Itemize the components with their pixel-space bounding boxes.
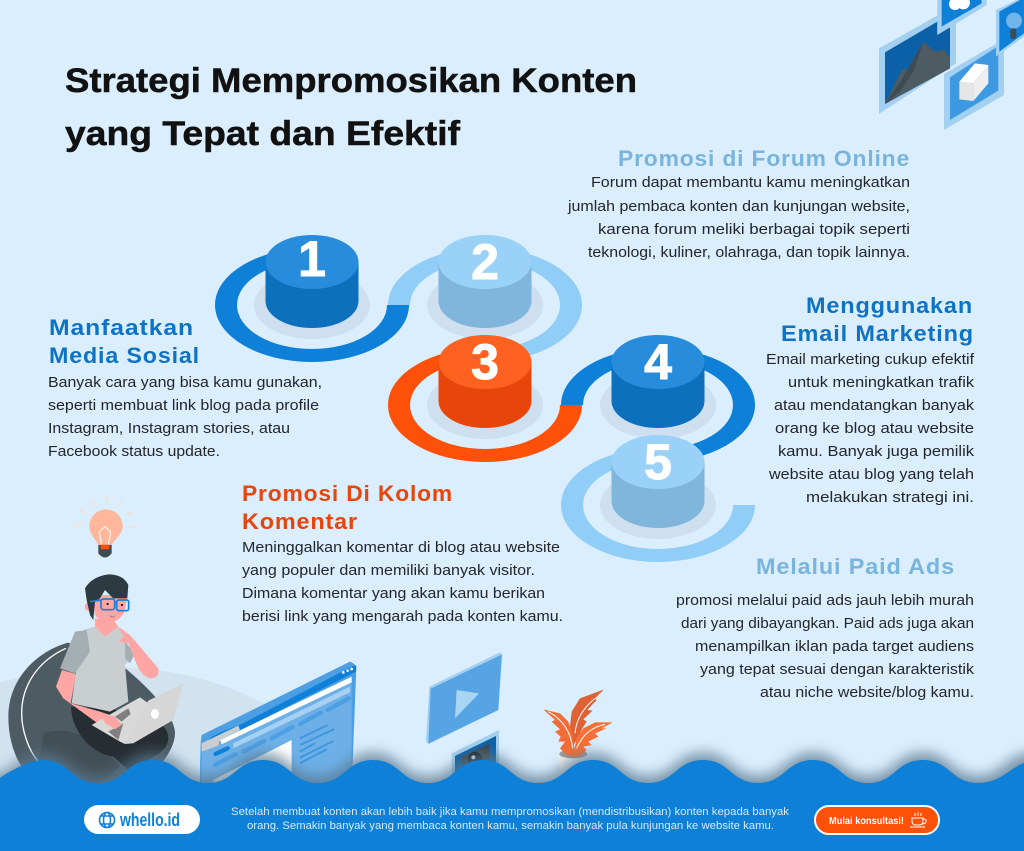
text block: Menggunakan Email Marketing: atau mendatangkan banyak	[774, 397, 975, 414]
text block: Manfaatkan Media Sosial: Instagram, Instagram stories, atau	[48, 420, 290, 437]
title	[65, 62, 637, 153]
text block: Manfaatkan Media Sosial: Facebook status update.	[48, 443, 220, 460]
text block: Promosi di Forum Online	[567, 146, 910, 261]
button: Mulai konsultasi	[815, 806, 939, 834]
step 2: 2	[471, 234, 499, 290]
text block: Menggunakan Email Marketing: Email marketing cukup efektif	[766, 351, 975, 368]
text block: Manfaatkan Media Sosial: Banyak cara yang bisa kamu gunakan,	[48, 374, 322, 391]
text block: Melalui Paid Ads: promosi melalui paid ads jauh lebih murah	[676, 592, 974, 609]
logo pill: whello.id	[84, 805, 200, 834]
text block: Promosi Di Kolom Komentar	[242, 481, 563, 625]
text block: Melalui Paid Ads: atau niche website/blog kamu.	[760, 684, 974, 701]
text block: Menggunakan Email Marketing: Email Marketing	[781, 321, 974, 346]
text block: Melalui Paid Ads: menampilkan iklan pada target audiens	[695, 638, 974, 655]
icon: speaker panel	[452, 730, 499, 780]
text block: Menggunakan Email Marketing: orang ke blog atau website	[775, 420, 974, 437]
step 3	[388, 334, 582, 462]
icon: light bulb	[75, 495, 137, 557]
step 1: 1	[298, 231, 326, 287]
text block: Promosi Di Kolom Komentar: Promosi Di Kolom	[242, 481, 453, 506]
diagram: five numbered steps	[215, 231, 755, 562]
text block: Promosi di Forum Online: karena forum meliki berbagai topik seperti	[598, 221, 910, 238]
step 1	[215, 231, 409, 362]
footer text: Setelah membuat konten akan lebih baik jika kamu mempromosikan (mendistribusikan) konten kepada banyak	[231, 806, 790, 818]
text block: Manfaatkan Media Sosial: seperti membuat link blog pada profile	[48, 397, 319, 414]
logo pill: whello.id: whello.id	[119, 810, 180, 830]
text block: Menggunakan Email Marketing: kamu. Banyak juga pemilik	[778, 443, 975, 460]
text block: Promosi Di Kolom Komentar: berisi link yang mengarah pada konten kamu.	[242, 608, 563, 625]
text block: Promosi di Forum Online: jumlah pembaca konten dan kunjungan website,	[567, 198, 910, 215]
panel: bulb picture	[996, 0, 1024, 57]
icon: plant	[543, 689, 613, 780]
footer text: orang. Semakin banyak yang membaca konten kamu, semakin banyak pula kunjungan ke website kamu.	[247, 820, 774, 832]
text block: Manfaatkan Media Sosial: Media Sosial	[49, 343, 200, 368]
text block: Melalui Paid Ads: dari yang dibayangkan. Paid ads juga akan	[681, 615, 974, 632]
text block: Manfaatkan Media Sosial: Manfaatkan	[49, 315, 194, 340]
text block: Promosi Di Kolom Komentar: Dimana komentar yang akan kamu berikan	[242, 585, 545, 602]
text block: Promosi Di Kolom Komentar: Komentar	[242, 509, 358, 534]
text block: Menggunakan Email Marketing: Menggunakan	[806, 293, 973, 318]
step 2	[388, 234, 582, 362]
footer band with wave edge	[0, 760, 1024, 851]
text block: Promosi Di Kolom Komentar: Meninggalkan komentar di blog atau website	[242, 539, 560, 556]
text block: Promosi di Forum Online: Forum dapat membantu kamu meningkatkan	[591, 174, 910, 191]
icon: coffee cup	[910, 812, 926, 827]
illustration: person on beanbag with browser	[8, 495, 356, 788]
text block: Menggunakan Email Marketing: untuk meningkatkan trafik	[788, 374, 975, 391]
footer text	[231, 806, 790, 832]
person	[56, 574, 168, 770]
wave shadow	[0, 743, 1024, 783]
title: Strategi Mempromosikan Konten	[65, 62, 637, 100]
step 3: 3	[471, 334, 499, 390]
text block: Menggunakan Email Marketing: melakukan strategi ini.	[806, 489, 974, 506]
text block: Manfaatkan Media Sosial	[48, 315, 322, 460]
browser window	[200, 662, 356, 788]
step 4	[561, 334, 755, 462]
panel: mountain picture	[879, 5, 956, 114]
text block: Promosi di Forum Online: teknologi, kuliner, olahraga, dan topik lainnya.	[588, 244, 910, 261]
text block: Melalui Paid Ads: Melalui Paid Ads	[756, 554, 955, 579]
text block: Menggunakan Email Marketing: website atau blog yang telah	[768, 466, 974, 483]
panel: cube picture	[944, 39, 1004, 130]
step 5: 5	[644, 434, 672, 490]
step 5	[561, 434, 755, 562]
title: yang Tepat dan Efektif	[65, 115, 461, 153]
icon: globe	[100, 812, 114, 828]
button: Mulai konsultasi: Mulai konsultasi!	[829, 815, 904, 827]
illustration: play panel, speaker and plant	[426, 653, 613, 780]
icon: play panel	[426, 653, 502, 744]
step 4: 4	[644, 334, 672, 390]
icon group: floating media panels top right	[879, 0, 1024, 130]
text block: Promosi di Forum Online: Promosi di Forum Online	[618, 146, 910, 171]
text block: Promosi Di Kolom Komentar: yang populer dan memiliki banyak visitor.	[242, 562, 535, 579]
laptop	[92, 683, 183, 744]
text block: Melalui Paid Ads: yang tepat sesuai dengan karakteristik	[700, 661, 975, 678]
panel: cloud picture	[937, 0, 987, 35]
text block: Menggunakan Email Marketing	[766, 293, 975, 506]
background hill	[0, 667, 370, 790]
beanbag	[8, 643, 175, 783]
text block: Melalui Paid Ads	[676, 554, 975, 701]
